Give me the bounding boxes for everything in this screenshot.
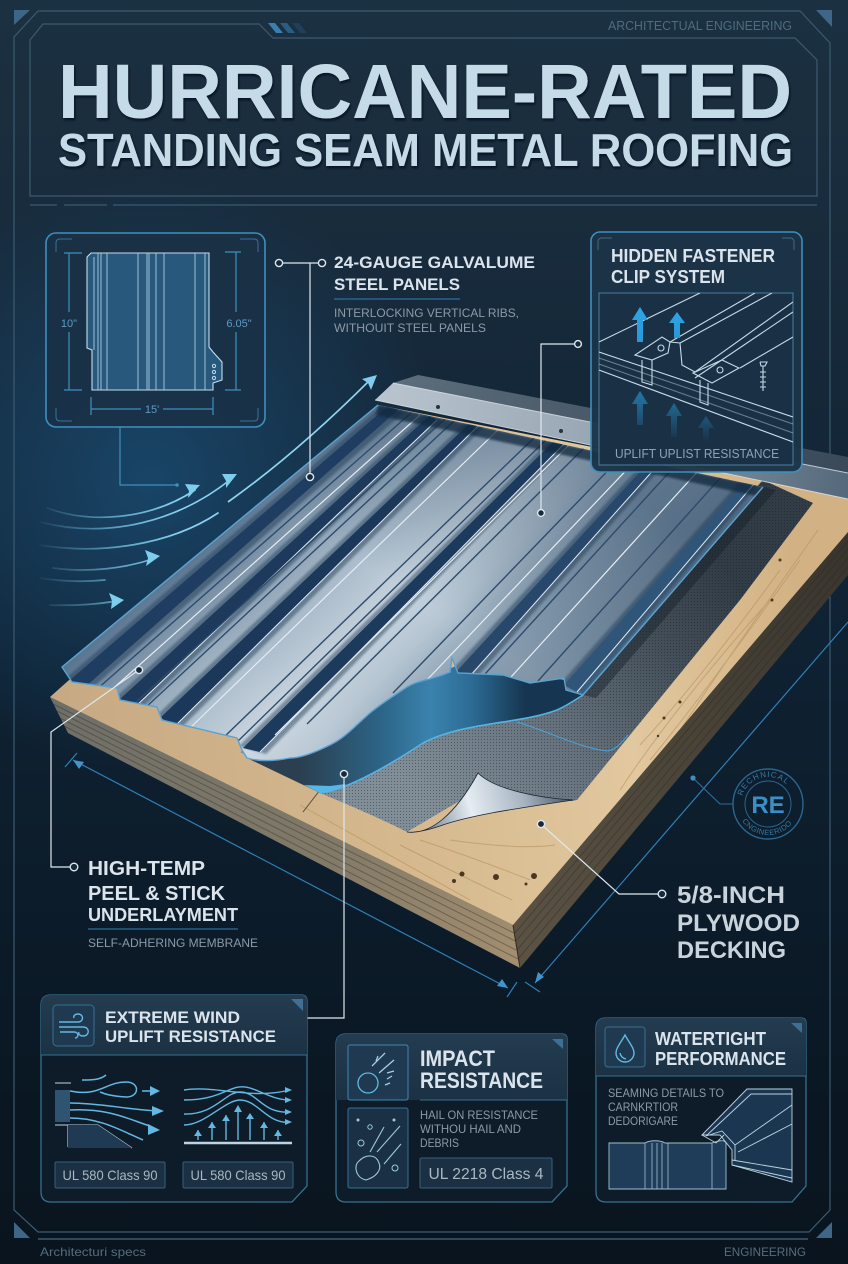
title panel	[30, 23, 817, 205]
card: watertight performance: SEAMING DETAILS TO	[608, 1086, 724, 1100]
rating pill	[55, 1162, 165, 1188]
rating pill	[420, 1158, 552, 1188]
hidden fastener clip card: HIDDEN FASTENER	[611, 246, 775, 266]
card: impact resistance: DEBRIS	[420, 1136, 459, 1150]
callout: plywood decking: PLYWOOD	[677, 910, 800, 937]
icon: hail	[348, 1108, 408, 1188]
panel profile detail card: 10"	[61, 318, 77, 330]
connector: plywood	[537, 820, 666, 898]
rating pill: UL 2218 Class 4	[428, 1166, 544, 1183]
diagram: uplift pressure	[184, 1087, 292, 1143]
metal roof panels	[50, 395, 780, 775]
callout: galvalume steel panels: WITHOUIT STEEL PANELS	[334, 321, 486, 335]
panel profile detail card: 6.05"	[226, 318, 252, 330]
footer right: ENGINEERING	[724, 1245, 806, 1259]
panel profile detail card: 15'	[145, 404, 159, 416]
rating pill: UL 580 Class 90	[190, 1167, 286, 1183]
panel profile detail card	[46, 233, 265, 427]
callout: galvalume steel panels: 24-GAUGE GALVALUME	[334, 253, 535, 272]
plywood deck	[50, 405, 848, 968]
card: watertight performance: PERFORMANCE	[655, 1049, 786, 1069]
diagram: wind over roof edge	[55, 1075, 164, 1148]
card: impact resistance: IMPACT	[420, 1046, 496, 1071]
hidden fastener clip card	[591, 232, 802, 472]
header tag: ARCHITECTUAL ENGINEERING	[608, 18, 792, 33]
card: impact resistance	[336, 1034, 567, 1202]
card: impact resistance: RESISTANCE	[420, 1068, 543, 1093]
card: extreme wind uplift resistance	[41, 995, 307, 1202]
hidden fastener clip card: UPLIFT UPLIST RESISTANCE	[615, 446, 779, 461]
title: HURRICANE-RATED	[58, 49, 792, 135]
connector: hidden clip	[538, 341, 581, 516]
callout: galvalume steel panels	[334, 253, 535, 335]
callout: plywood decking: DECKING	[677, 937, 786, 964]
callout: galvalume steel panels: STEEL PANELS	[334, 275, 460, 294]
hidden fastener clip card: CLIP SYSTEM	[611, 267, 725, 287]
card: extreme wind uplift resistance: EXTREME WIND	[105, 1008, 240, 1027]
panel cross-section drawing	[87, 253, 222, 390]
callout: high-temp underlayment: PEEL & STICK	[88, 883, 226, 905]
icon: impact	[348, 1045, 408, 1100]
callout: high-temp underlayment: UNDERLAYMENT	[88, 905, 238, 925]
wind flow arrows	[40, 375, 377, 609]
card: impact resistance: WITHOU HAIL AND	[420, 1122, 521, 1136]
clip line drawing	[599, 293, 793, 442]
dimension marks	[64, 252, 241, 415]
card: watertight performance: DEDORIGARE	[608, 1114, 678, 1128]
icon: wind	[53, 1005, 94, 1046]
card: watertight performance: CARNKRTIOR	[608, 1100, 678, 1114]
callout: plywood decking: 5/8-INCH	[677, 882, 785, 909]
callout: plywood decking	[677, 882, 800, 964]
callout: high-temp underlayment: HIGH-TEMP	[88, 858, 205, 880]
peeled membrane corner	[407, 773, 573, 832]
footer left: Architecturi specs	[40, 1245, 146, 1259]
connector: profile card to wind area	[120, 427, 179, 487]
connector: galvalume panels	[275, 259, 326, 481]
title: STANDING SEAM METAL ROOFING	[58, 124, 793, 176]
technical badge: RECHNICAL	[737, 772, 788, 796]
technical badge: CNGINEERIDO	[743, 819, 791, 835]
connector: high-temp underlayment	[51, 666, 143, 871]
callout: high-temp underlayment: SELF-ADHERING MEMBRANE	[88, 936, 258, 950]
dimension lines around deck	[65, 622, 848, 997]
technical badge	[690, 768, 804, 840]
callout: high-temp underlayment	[88, 858, 258, 950]
rating pill	[183, 1162, 293, 1188]
card: watertight performance: WATERTIGHT	[655, 1029, 766, 1049]
underlayment membrane	[240, 480, 813, 832]
icon: water drop	[605, 1027, 645, 1067]
title	[58, 49, 793, 176]
callout: galvalume steel panels: INTERLOCKING VERTICAL RIBS,	[334, 306, 519, 320]
technical badge: RE	[751, 792, 785, 819]
ridge cap	[375, 375, 848, 499]
card: extreme wind uplift resistance: UPLIFT RESISTANCE	[105, 1027, 276, 1046]
connector: underlayment to wind card	[307, 770, 348, 1018]
rating pill: UL 580 Class 90	[62, 1167, 158, 1183]
seam detail drawing	[609, 1089, 792, 1189]
card: watertight performance	[596, 1018, 806, 1202]
card: impact resistance: HAIL ON RESISTANCE	[420, 1108, 538, 1122]
